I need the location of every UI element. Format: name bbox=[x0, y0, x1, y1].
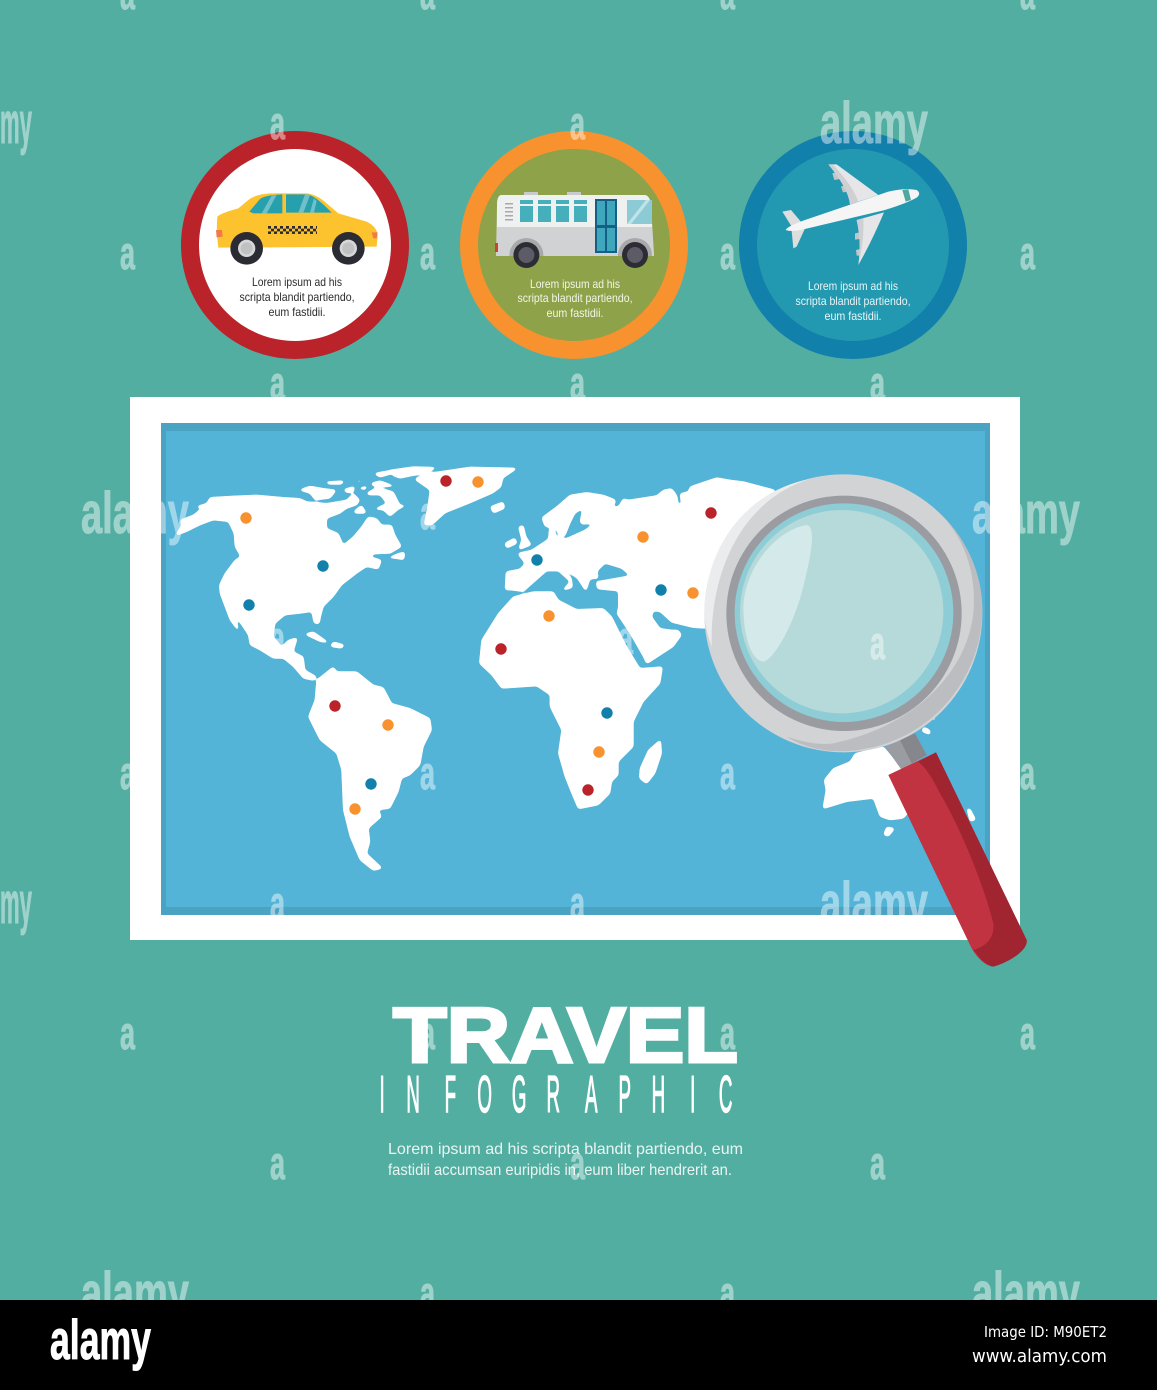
watermark: stock photo overlay: my bbox=[0, 91, 32, 156]
watermark: stock photo overlay: a bbox=[720, 227, 735, 279]
icon: airplane bbox=[782, 164, 919, 265]
icon: bus bbox=[495, 192, 654, 274]
watermark: stock photo overlay: a bbox=[120, 747, 135, 799]
watermark: stock photo overlay: a bbox=[570, 357, 585, 409]
watermark: stock photo overlay: a bbox=[120, 227, 135, 279]
icon: magnifying glass bbox=[704, 474, 1027, 967]
watermark: stock photo overlay: a bbox=[1020, 1007, 1035, 1059]
watermark: stock photo overlay: a bbox=[618, 612, 633, 664]
subtitle: INFOGRAPHIC: INFOGRAPHIC bbox=[379, 1067, 732, 1124]
text: plane caption bbox=[796, 279, 910, 323]
panel: plane badge bbox=[739, 131, 967, 359]
watermark: stock photo overlay: my bbox=[0, 871, 32, 936]
watermark: stock photo overlay: a bbox=[270, 877, 285, 929]
text: plane caption: scripta blandit partiendo, bbox=[796, 294, 910, 308]
panel: bus badge bbox=[460, 131, 688, 359]
text: plane caption: eum fastidii. bbox=[824, 309, 882, 323]
watermark: stock photo overlay: a bbox=[420, 487, 435, 539]
watermark: stock photo overlay: a bbox=[120, 1007, 135, 1059]
map: continents bbox=[175, 467, 976, 871]
watermark: stock photo overlay: a bbox=[870, 617, 885, 669]
watermark: stock photo overlay: a bbox=[420, 1007, 435, 1059]
watermark: stock photo overlay: alamy bbox=[81, 481, 189, 546]
watermark: stock photo overlay: alamy bbox=[972, 481, 1080, 546]
watermark: stock photo overlay: a bbox=[420, 1267, 435, 1319]
map: Americas bbox=[175, 467, 438, 871]
footer image id: Image ID: M90ET2 bbox=[984, 1323, 1107, 1341]
watermark: stock photo overlay: a bbox=[570, 1137, 585, 1189]
watermark: stock photo overlay: a bbox=[420, 227, 435, 279]
watermark: stock photo overlay: a bbox=[1020, 227, 1035, 279]
watermark: stock photo overlay: a bbox=[720, 1267, 735, 1319]
text: bus caption bbox=[518, 277, 632, 320]
footer bar bbox=[0, 1300, 1157, 1390]
map: Australia and islands bbox=[823, 716, 976, 837]
watermark: stock photo overlay: a bbox=[270, 612, 285, 664]
text: taxi caption: scripta blandit partiendo, bbox=[240, 290, 354, 304]
watermark: stock photo overlay: alamy bbox=[972, 1261, 1080, 1326]
watermark: stock photo overlay: a bbox=[570, 97, 585, 149]
panel: taxi badge bbox=[181, 131, 409, 359]
text: body copy: fastidii accumsan euripidis in, eum liber hendrerit an. bbox=[388, 1162, 732, 1179]
watermark: stock photo overlay: a bbox=[570, 877, 585, 929]
footer logo: alamy bbox=[50, 1308, 151, 1371]
footer url: www.alamy.com bbox=[972, 1346, 1107, 1367]
map: Africa bbox=[479, 592, 663, 809]
watermark: stock photo overlay: alamy bbox=[820, 91, 928, 156]
text: taxi caption: Lorem ipsum ad his bbox=[252, 275, 342, 289]
watermark: stock photo overlay: a bbox=[1020, 747, 1035, 799]
text: plane caption: Lorem ipsum ad his bbox=[808, 279, 898, 293]
icon: taxi bbox=[216, 193, 378, 265]
watermark: stock photo overlay: a bbox=[270, 1137, 285, 1189]
text: bus caption: eum fastidii. bbox=[546, 306, 604, 320]
icon: taxi checker stripe bbox=[268, 226, 317, 234]
text: bus caption: Lorem ipsum ad his bbox=[530, 277, 620, 291]
text: bus caption: scripta blandit partiendo, bbox=[518, 291, 632, 305]
watermark: stock photo overlay: alamy bbox=[820, 871, 928, 936]
text: taxi caption: eum fastidii. bbox=[268, 305, 326, 319]
map: Eurasia bbox=[490, 478, 777, 664]
watermark: stock photo overlay: a bbox=[720, 1007, 735, 1059]
text: taxi caption bbox=[240, 275, 354, 319]
text: body copy: Lorem ipsum ad his scripta blandit partiendo, eum bbox=[388, 1141, 743, 1158]
watermark: stock photo overlay: a bbox=[270, 97, 285, 149]
panel: world map bbox=[130, 397, 1020, 940]
watermark: stock photo overlay: a bbox=[420, 747, 435, 799]
map: Greenland bbox=[414, 467, 518, 525]
map: location pins bbox=[240, 475, 717, 815]
watermark: stock photo overlay: a bbox=[870, 357, 885, 409]
text: body copy bbox=[388, 1141, 743, 1179]
watermark: stock photo overlay: a bbox=[720, 747, 735, 799]
title: TRAVEL: TRAVEL bbox=[393, 991, 738, 1079]
watermark: stock photo overlay: a bbox=[270, 357, 285, 409]
watermark: stock photo overlay: a bbox=[870, 1137, 885, 1189]
watermark: stock photo overlay: alamy bbox=[81, 1261, 189, 1326]
